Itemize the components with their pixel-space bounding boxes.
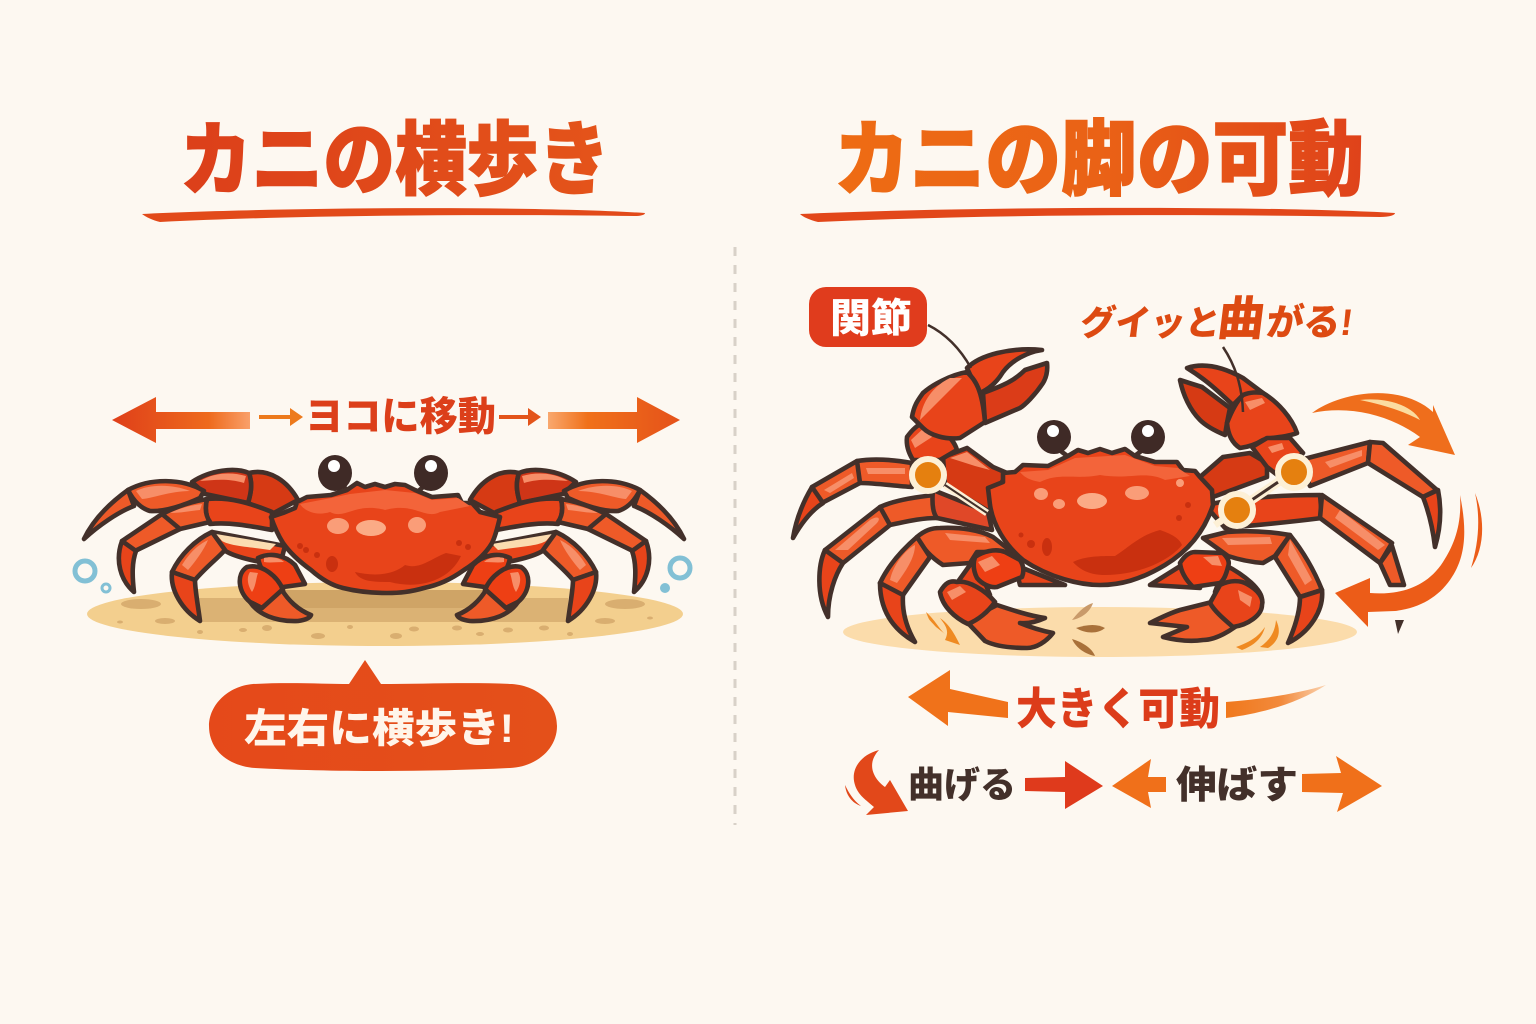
crab: legs flexing [793, 349, 1440, 648]
callout: gui tto magaru: がる! [1264, 301, 1355, 343]
small arrow left of label [259, 408, 303, 426]
right shoulder and arm [1200, 438, 1303, 497]
callout: gui tto magaru [1078, 292, 1357, 412]
orange arrow left [1112, 759, 1166, 808]
right claw [1180, 366, 1297, 448]
right second leg [1205, 495, 1404, 634]
left claw leg [940, 550, 1065, 648]
callout: kansetsu [809, 287, 971, 368]
curved arrow top right [1312, 393, 1455, 455]
carapace [988, 449, 1213, 585]
swoosh right of large range label [1226, 685, 1326, 718]
panel: right, leg motion [793, 115, 1482, 815]
speech bubble: sayuu ni yokoaruki [209, 660, 557, 771]
bubbles left [75, 561, 110, 592]
eyes [1037, 420, 1165, 458]
right upper leg [1300, 442, 1440, 547]
right movement arrow [548, 397, 680, 443]
small arrow right of label [499, 408, 541, 426]
curved arrow lower right [1335, 493, 1482, 627]
left second leg [819, 490, 992, 617]
callout: gui tto magaru: 曲 [1215, 292, 1268, 345]
speech bubble: sayuu ni yokoaruki: 左右に横歩き! [244, 707, 514, 751]
curved bend arrow [845, 750, 908, 815]
sand [87, 582, 683, 646]
orange arrow right [1302, 756, 1382, 812]
joint links [945, 472, 1293, 525]
center divider [734, 247, 736, 825]
label: mageru: 曲げる [908, 764, 1016, 805]
joint marker left [912, 459, 944, 491]
left shoulder and arm [907, 423, 1007, 512]
title underline brush [142, 208, 645, 222]
right third leg [1203, 531, 1322, 643]
callout: kansetsu: 関節 [830, 297, 912, 341]
arrow left of large range label [908, 670, 1008, 726]
joint marker upper right [1278, 456, 1310, 488]
impact marks [1072, 603, 1105, 656]
carapace [271, 483, 500, 593]
label: nobasu: 伸ばす [1176, 765, 1298, 807]
left third leg [880, 528, 1012, 642]
title: kani no yokoaruki: カニの横歩き [180, 116, 610, 205]
left claw [912, 349, 1047, 438]
joint marker lower right [1221, 494, 1253, 526]
title: kani no ashi no kadou: カニの脚の可動 [834, 115, 1364, 206]
right claw leg [1150, 552, 1262, 641]
eyes [318, 455, 448, 494]
bubbles right [660, 558, 690, 593]
left upper leg [793, 460, 912, 538]
left movement arrow [112, 397, 250, 443]
crab: sideways walking [84, 455, 684, 621]
label: yoko ni idou: ヨコに移動 [305, 395, 496, 439]
sand [843, 607, 1357, 657]
title underline brush [800, 208, 1395, 222]
red arrow right [1025, 761, 1103, 809]
label: ookiku kadou: 大きく可動 [1016, 685, 1220, 734]
callout: gui tto magaru: グイッと [1078, 303, 1223, 343]
panel: left, sideways walk [75, 116, 690, 771]
